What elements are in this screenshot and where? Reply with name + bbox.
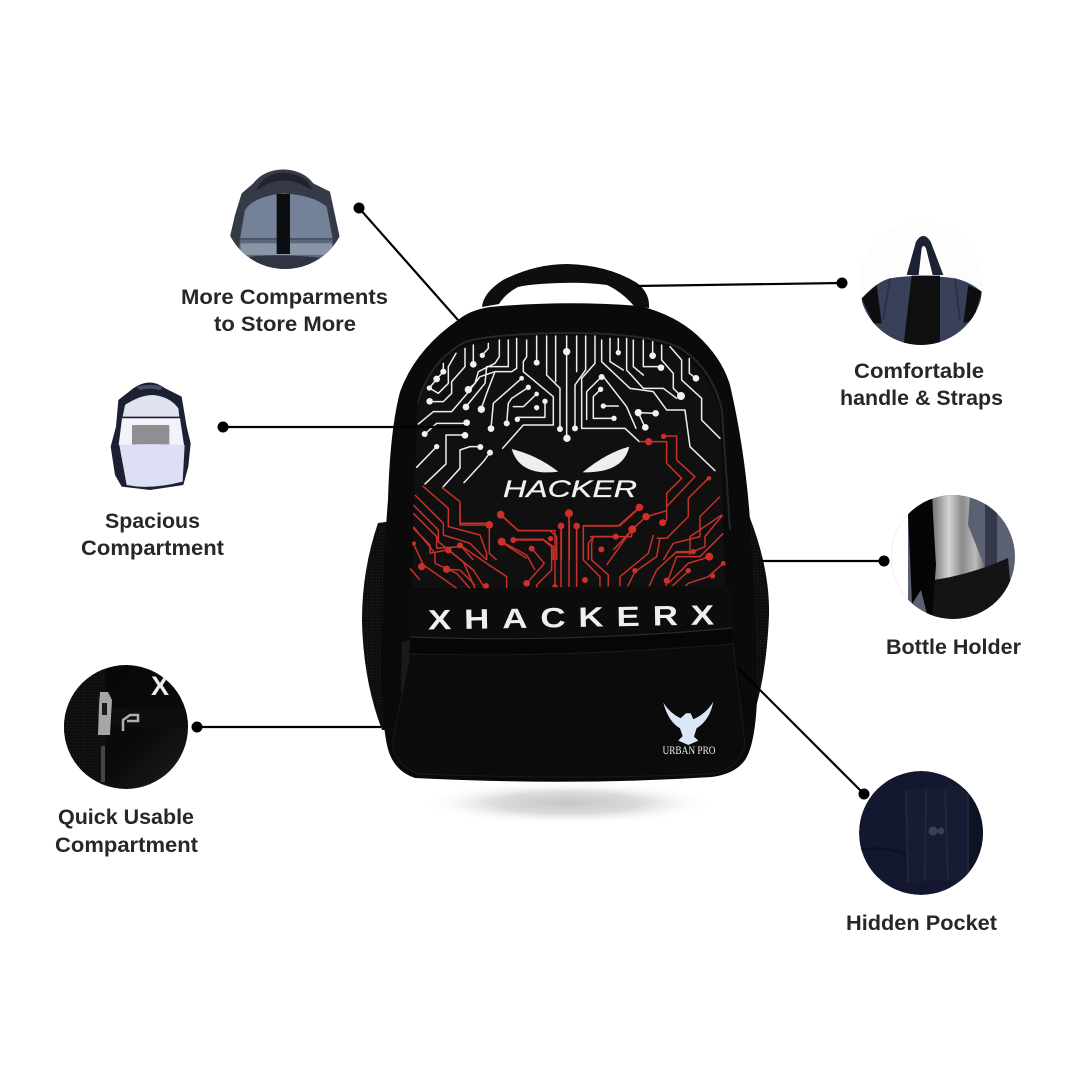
XHACKERX band text: XHACKERX [428, 599, 714, 636]
icon: bottle [891, 495, 1015, 619]
eagle emblem [663, 702, 713, 745]
line: quick usable [192, 722, 381, 732]
white circuit dots [422, 348, 699, 456]
backpack body [382, 303, 757, 782]
label line 2: Compartment [55, 834, 198, 857]
icon: open backpack [111, 382, 191, 490]
icon: pocket closeup [859, 771, 995, 895]
URBAN PRO logo [662, 702, 716, 757]
eyes [512, 447, 629, 472]
side mesh pockets [362, 518, 769, 735]
label: Quick Usable [58, 806, 194, 829]
feature: bottle holder [886, 495, 1021, 659]
connector lines [192, 202, 890, 800]
feature: comfortable handle [840, 221, 1003, 410]
URBAN PRO logo: URBAN PRO [662, 745, 716, 757]
label: Comfortable [854, 360, 984, 383]
line: compartments [354, 202, 458, 320]
label: Hidden Pocket [846, 912, 997, 935]
backpack illustration [362, 264, 769, 782]
floor shadow [420, 781, 716, 825]
printed panel [412, 336, 725, 588]
feature: quick usable [55, 665, 198, 857]
zipper pocket [392, 628, 745, 777]
line: spacious [218, 422, 467, 432]
red dots upper [486, 434, 711, 529]
label line 2: Compartment [81, 537, 224, 560]
white circuit traces [417, 336, 720, 487]
feature: spacious compartment [81, 382, 224, 560]
HACKER logo text: HACKER [503, 476, 637, 503]
line: bottle [762, 556, 890, 566]
icon: zipper closeup [64, 665, 190, 789]
label: More Comparments [181, 286, 388, 309]
label: Spacious [105, 510, 200, 533]
label line 2: to Store More [214, 313, 356, 336]
label: Bottle Holder [886, 636, 1021, 659]
top handle [482, 264, 649, 308]
red circuit traces upper [413, 436, 723, 560]
red circuit traces lower [410, 505, 723, 588]
red circuit dots [412, 504, 726, 589]
band cover [408, 586, 732, 638]
feature: hidden pocket [846, 771, 997, 935]
icon: open compartment [230, 169, 340, 273]
line: handle [636, 278, 848, 288]
letter X: X [151, 671, 169, 701]
icon: straps [862, 236, 982, 345]
line: hidden pocket [737, 667, 870, 800]
feature: more compartments [181, 169, 388, 336]
label line 2: handle & Straps [840, 387, 1003, 410]
body seam [418, 333, 730, 530]
